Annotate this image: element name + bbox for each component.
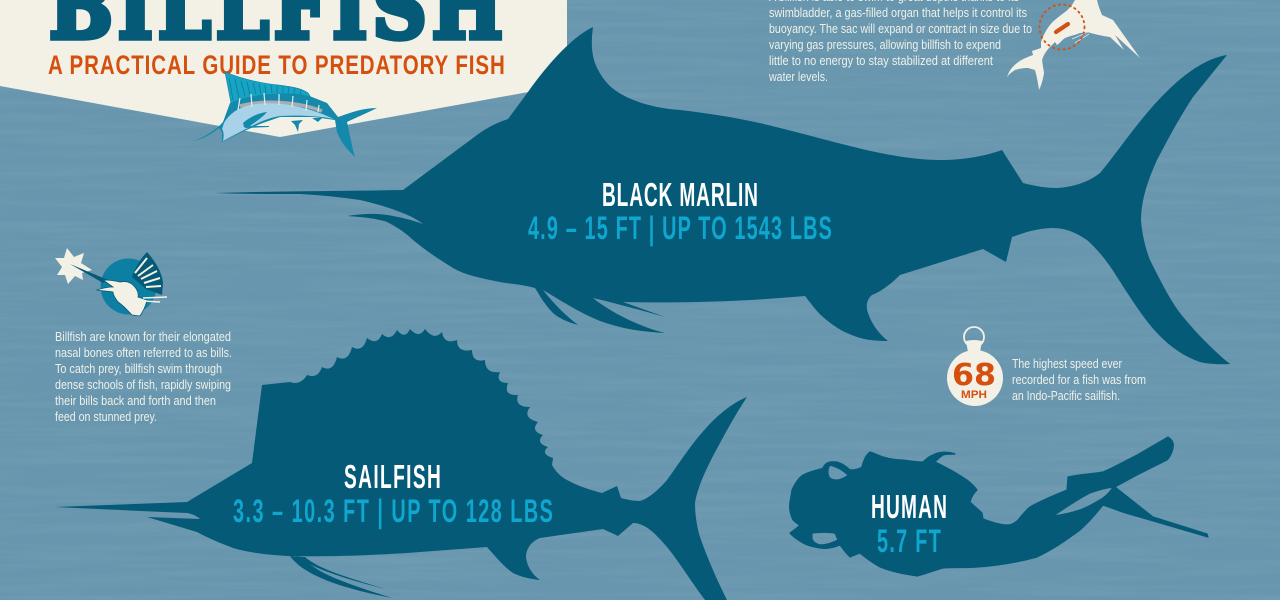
stopwatch face: [947, 350, 1003, 406]
anal fin: [291, 118, 322, 132]
sail stripes: [135, 258, 161, 287]
dotted circle: [1040, 4, 1084, 50]
speed description text: [1012, 356, 1146, 403]
pale ribs: [238, 93, 319, 112]
sail: [132, 252, 163, 295]
stopwatch stem: [966, 340, 982, 352]
top right text block: [768, 0, 1032, 84]
human heading: HUMAN: [871, 489, 947, 525]
speed description text: an Indo-Pacific sailfish.: [1012, 388, 1120, 403]
top right text block: buoyancy. The sac will expand or contract in size due to: [769, 21, 1032, 36]
human stats: 5.7 FT: [877, 523, 941, 559]
pectoral strands: [1072, 32, 1089, 43]
light belly: [222, 103, 334, 141]
fish head: [97, 280, 147, 316]
icon: sailfish with star: [55, 248, 167, 316]
bill description text: To catch prey, billfish swim through: [55, 361, 222, 376]
black marlin silhouette: [215, 27, 1230, 364]
sailfish silhouette: [55, 329, 747, 600]
subtitle: A PRACTICAL GUIDE TO PREDATORY FISH: [48, 50, 505, 81]
sail stripes: [229, 78, 301, 100]
bill description text: [55, 329, 232, 424]
bill: [70, 264, 108, 283]
speed value: 68: [952, 358, 996, 393]
human diver silhouette: [790, 437, 1208, 576]
illustration: blue marlin: [193, 72, 377, 157]
bill description text: feed on stunned prey.: [55, 409, 157, 424]
top right text block: varying gas pressures, allowing billfish to expend: [769, 37, 1001, 52]
icon: swimbladder fish: [1007, 0, 1140, 90]
swimbladder: [1056, 24, 1068, 32]
dorsal sail: [225, 72, 312, 103]
top right text block: little to no energy to stay stabilized at different: [769, 53, 993, 68]
speed unit: MPH: [961, 389, 987, 401]
tail strands: [143, 297, 167, 302]
grey stripe: [240, 102, 322, 111]
speed description text: The highest speed ever: [1012, 356, 1123, 371]
bill description text: nasal bones often referred to as bills.: [55, 345, 232, 360]
stopwatch ring: [964, 327, 984, 347]
title banner: [0, 0, 567, 137]
black marlin heading: BLACK MARLIN: [602, 177, 758, 213]
star: [55, 248, 92, 284]
sailfish ventral fin: [290, 556, 392, 598]
bill description text: Billfish are known for their elongated: [55, 329, 231, 344]
speed description text: recorded for a fish was from: [1012, 372, 1146, 387]
teal circle: [100, 258, 156, 314]
top right text block: swimbladder, a gas-filled organ that helps it control its: [769, 5, 1027, 20]
icon: stopwatch 68 mph: [947, 327, 1003, 406]
pectoral fin: [243, 112, 269, 128]
bill description text: their bills back and forth and then: [55, 393, 216, 408]
black marlin stats: 4.9 – 15 FT | UP TO 1543 LBS: [528, 210, 832, 246]
bill description text: dense schools of fish, rapidly swiping: [55, 377, 231, 392]
top right text block: water levels.: [768, 69, 828, 84]
sailfish stats: 3.3 – 10.3 FT | UP TO 128 LBS: [233, 493, 553, 529]
sailfish heading: SAILFISH: [344, 459, 441, 495]
body and fins: [193, 93, 377, 157]
